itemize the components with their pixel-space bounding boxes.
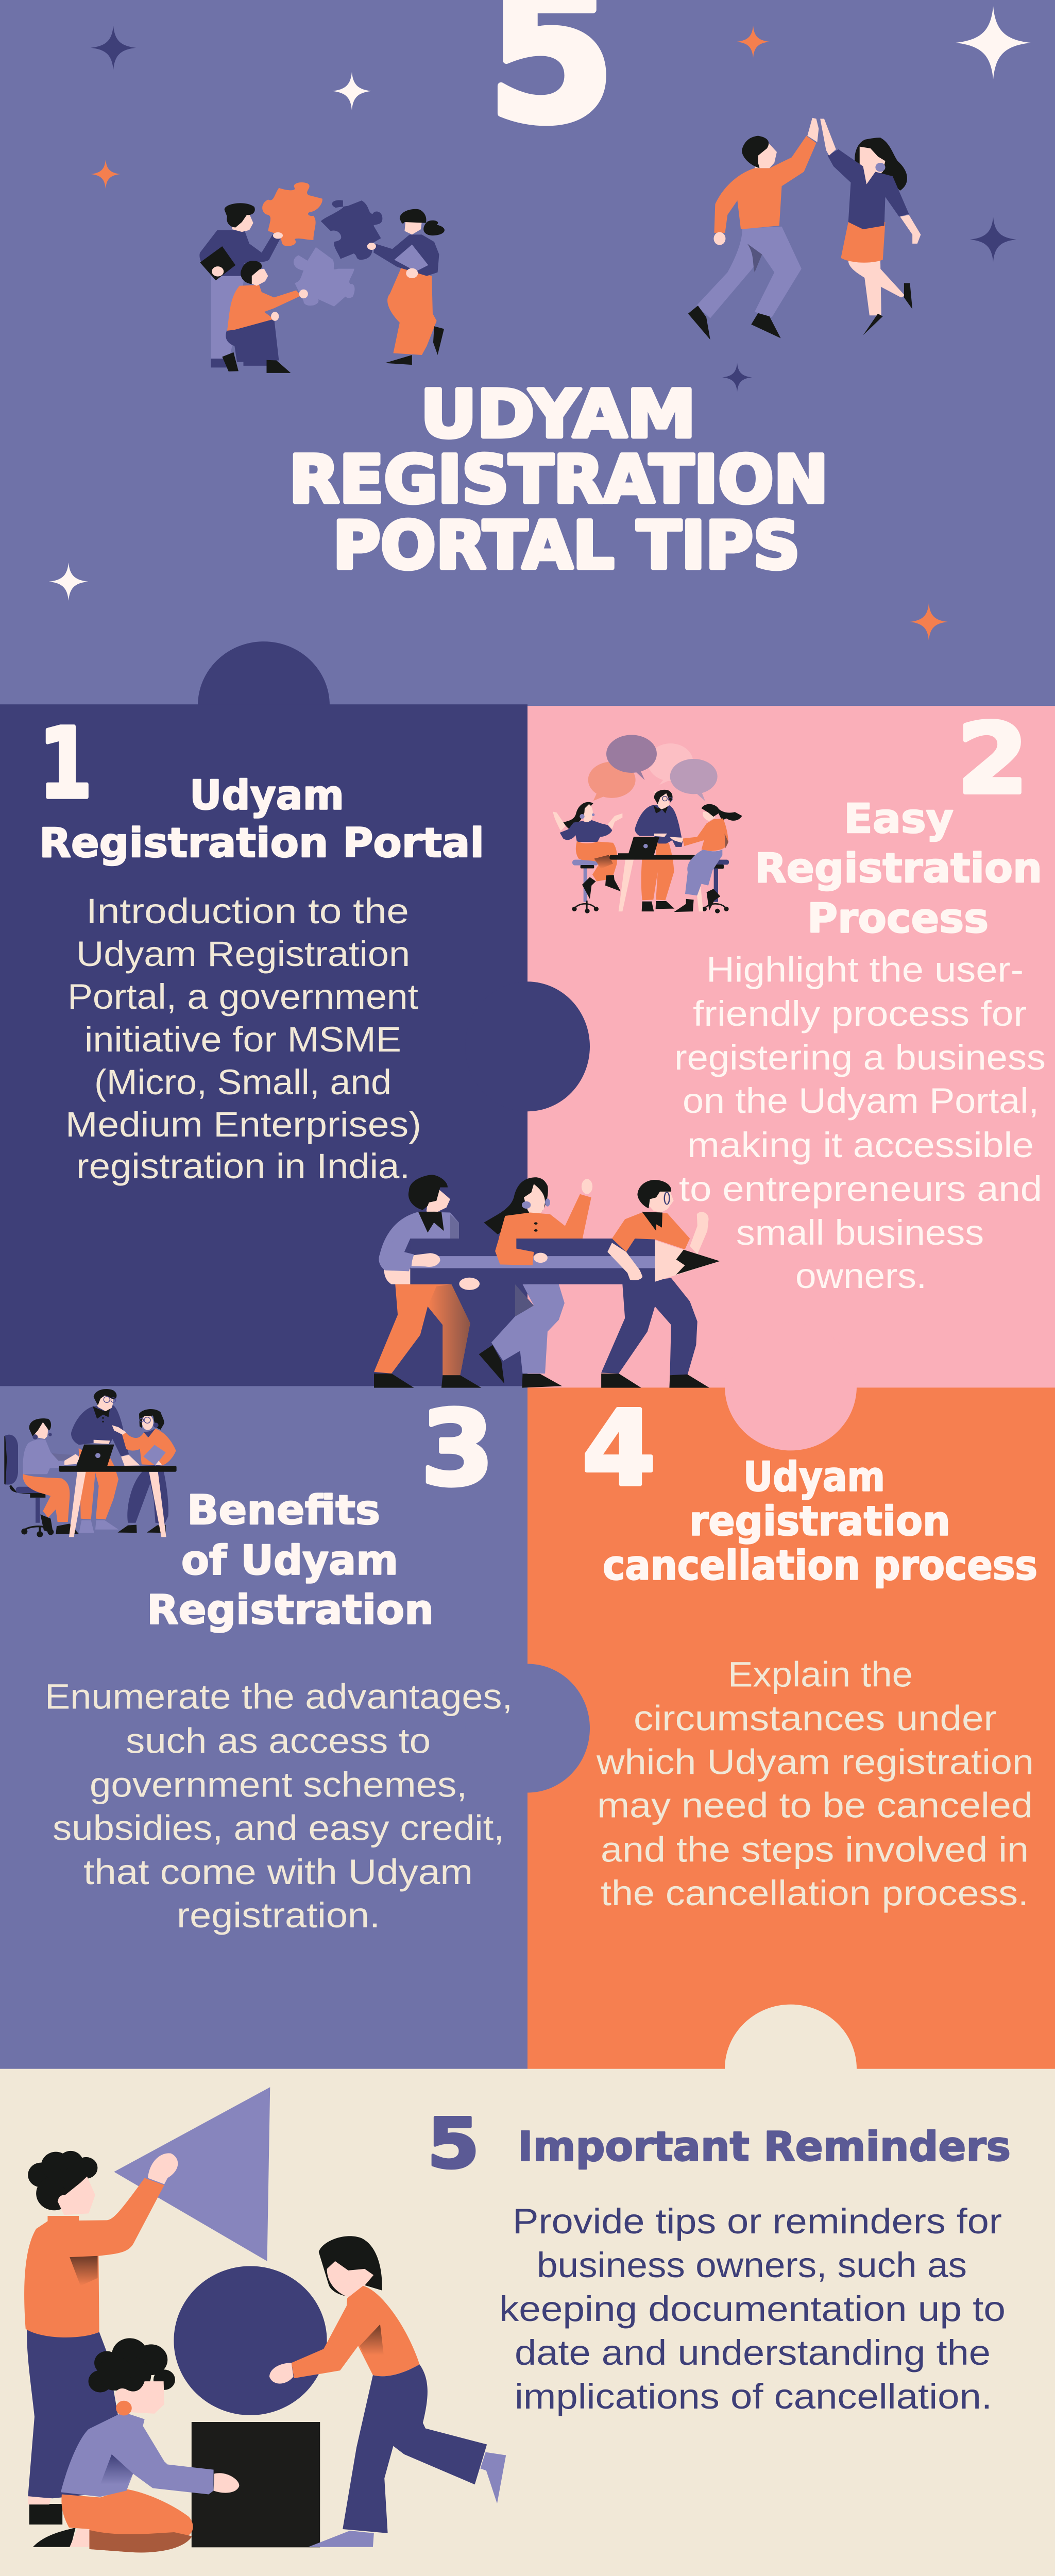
- person: seated woman right with ponytail: [670, 804, 742, 912]
- heading: Udyam Registration Portal: Registration Portal: [39, 820, 484, 867]
- panel: 2 bottom puzzle tab: [725, 1323, 857, 1450]
- title: Udyam Registration Portal Tips: PORTAL TIPS: [333, 508, 800, 584]
- text: panel 1 body: [65, 891, 421, 1186]
- text: panel 1 body: Portal, a government: [67, 977, 418, 1016]
- heading: Benefits of Udyam Registration: Benefits: [187, 1487, 380, 1534]
- person: standing man with folder: [199, 203, 283, 367]
- top puzzle tab: [198, 641, 330, 769]
- text: panel 2 body: small business: [736, 1213, 984, 1252]
- title: Udyam Registration Portal Tips: UDYAM: [420, 377, 696, 452]
- text: panel 1 body: Udyam Registration: [76, 934, 410, 974]
- text: panel 5 body: date and understanding the: [515, 2333, 991, 2372]
- heading: Udyam registration cancellation process: [603, 1453, 1037, 1589]
- heading: Benefits of Udyam Registration: [147, 1487, 434, 1633]
- heading: Udyam Registration Portal: Udyam: [190, 772, 344, 819]
- illustration: meeting at table with speech bubbles: [553, 735, 742, 913]
- text: panel 1 body: Introduction to the: [86, 891, 409, 931]
- heading: Benefits of Udyam Registration: of Udyam: [181, 1537, 398, 1584]
- person: woman high five: [820, 119, 921, 335]
- text: panel 4 body: Explain the: [728, 1654, 913, 1694]
- icon: triangle circle square: [114, 2087, 327, 2547]
- icon: table and stools: [572, 860, 729, 913]
- person: standing man with glasses: [71, 1389, 140, 1533]
- person: right with glasses: [601, 1212, 709, 1388]
- icon: pencil: [410, 1239, 720, 1290]
- person: middle woman: [479, 1177, 592, 1388]
- text: panel 1 body: registration in India.: [76, 1146, 410, 1186]
- illustration: puzzle team and high five: [199, 118, 921, 373]
- panel: 4 cancellation background: [528, 1387, 1055, 2070]
- panel: 5 Important Reminders background: [0, 2005, 1055, 2576]
- text: panel 3 body: registration.: [177, 1895, 380, 1935]
- number 4: 4: [582, 1388, 656, 1509]
- text: panel 2 body: to entrepreneurs and: [679, 1169, 1042, 1209]
- heading: Udyam registration cancellation process: registration: [689, 1498, 950, 1545]
- text: panel 4 body: circumstances under: [634, 1698, 997, 1738]
- text: panel 2 body: Highlight the user-: [706, 950, 1024, 989]
- text: panel 5 body: Provide tips or reminders for: [513, 2201, 1002, 2241]
- heading: Easy Registration Process: Registration: [755, 845, 1042, 892]
- text: panel 2 body: on the Udyam Portal,: [683, 1081, 1039, 1121]
- text: panel 2 body: making it accessible: [687, 1125, 1034, 1165]
- text: panel 2 body: [674, 950, 1046, 1296]
- number 5 small: 5: [427, 2104, 480, 2184]
- text: panel 4 body: and the steps involved in: [601, 1829, 1029, 1869]
- icon: speech bubbles: [588, 735, 718, 801]
- heading: Easy Registration Process: Easy: [844, 795, 954, 842]
- heading: Easy Registration Process: Process: [807, 895, 989, 942]
- person: kneeling with orange top: [222, 261, 308, 373]
- person: man high five: [688, 118, 819, 340]
- number 3: 3: [421, 1388, 494, 1509]
- text: panel 1 body: initiative for MSME: [84, 1020, 401, 1059]
- text: panel 4 body: [596, 1654, 1034, 1913]
- heading: Udyam Registration Portal: [39, 772, 484, 867]
- heading: Benefits of Udyam Registration: Registration: [147, 1586, 434, 1633]
- panel: 3 Benefits background: [0, 1386, 590, 2071]
- panel: 2 Easy Registration Process background: [528, 706, 1055, 1388]
- icon: puzzle pieces: [262, 182, 382, 307]
- person: tall figure reaching up: [24, 2151, 178, 2547]
- text: panel 3 body: Enumerate the advantages,: [45, 1676, 513, 1716]
- text: panel 3 body: [45, 1676, 513, 1935]
- text: panel 2 body: friendly process for: [693, 994, 1027, 1033]
- person: running figure pushing circle: [269, 2236, 506, 2547]
- illustration: people arranging shapes: [24, 2087, 506, 2552]
- arms and hands over pencil: [379, 1180, 690, 1280]
- text: panel 3 body: subsidies, and easy credit,: [53, 1808, 504, 1848]
- text: panel 5 body: keeping documentation up to: [499, 2289, 1006, 2329]
- text: panel 2 body: registering a business: [674, 1038, 1046, 1077]
- person: standing man with laptop: [609, 790, 695, 911]
- text: panel 4 body: which Udyam registration: [596, 1742, 1034, 1782]
- illustration: office desk team: [4, 1389, 177, 1537]
- person: left with curly hair: [374, 1175, 481, 1388]
- text: panel 3 body: government schemes,: [90, 1765, 467, 1804]
- person: woman with glasses and folder: [112, 1409, 176, 1533]
- icon: office chair: [4, 1435, 54, 1537]
- text: panel 5 body: [499, 2201, 1006, 2416]
- heading: Easy Registration Process: [755, 795, 1042, 942]
- person: crouching figure: [61, 2338, 239, 2552]
- heading: Important Reminders: Important Reminders: [518, 2123, 1011, 2170]
- text: panel 3 body: that come with Udyam: [83, 1852, 473, 1892]
- text: panel 2 body: owners.: [795, 1256, 927, 1296]
- title: Udyam Registration Portal Tips: [289, 377, 828, 584]
- text: panel 1 body: Medium Enterprises): [65, 1105, 421, 1144]
- number 1: 1: [39, 707, 92, 820]
- text: panel 1 body: (Micro, Small, and: [94, 1062, 392, 1102]
- number 2: 2: [957, 703, 1028, 816]
- heading: Udyam registration cancellation process: Udyam: [743, 1453, 885, 1500]
- panel: 1 Udyam Registration Portal background: [0, 704, 590, 1386]
- header background: [0, 0, 1055, 709]
- icon: desk and laptop: [59, 1445, 177, 1537]
- person: woman with folder and orange trousers: [367, 209, 445, 365]
- text: panel 5 body: implications of cancellation.: [515, 2377, 992, 2416]
- title: Udyam Registration Portal Tips: REGISTRATION: [289, 442, 828, 518]
- person: seated woman: [23, 1418, 80, 1534]
- illustration: three people carrying a pencil: [374, 1175, 720, 1388]
- text: panel 3 body: such as access to: [126, 1721, 431, 1760]
- person: seated woman left: [553, 802, 622, 899]
- text: panel 4 body: may need to be canceled: [597, 1785, 1033, 1825]
- text: panel 4 body: the cancellation process.: [601, 1873, 1029, 1913]
- sparkles: [49, 6, 1031, 640]
- text: panel 5 body: business owners, such as: [537, 2245, 967, 2285]
